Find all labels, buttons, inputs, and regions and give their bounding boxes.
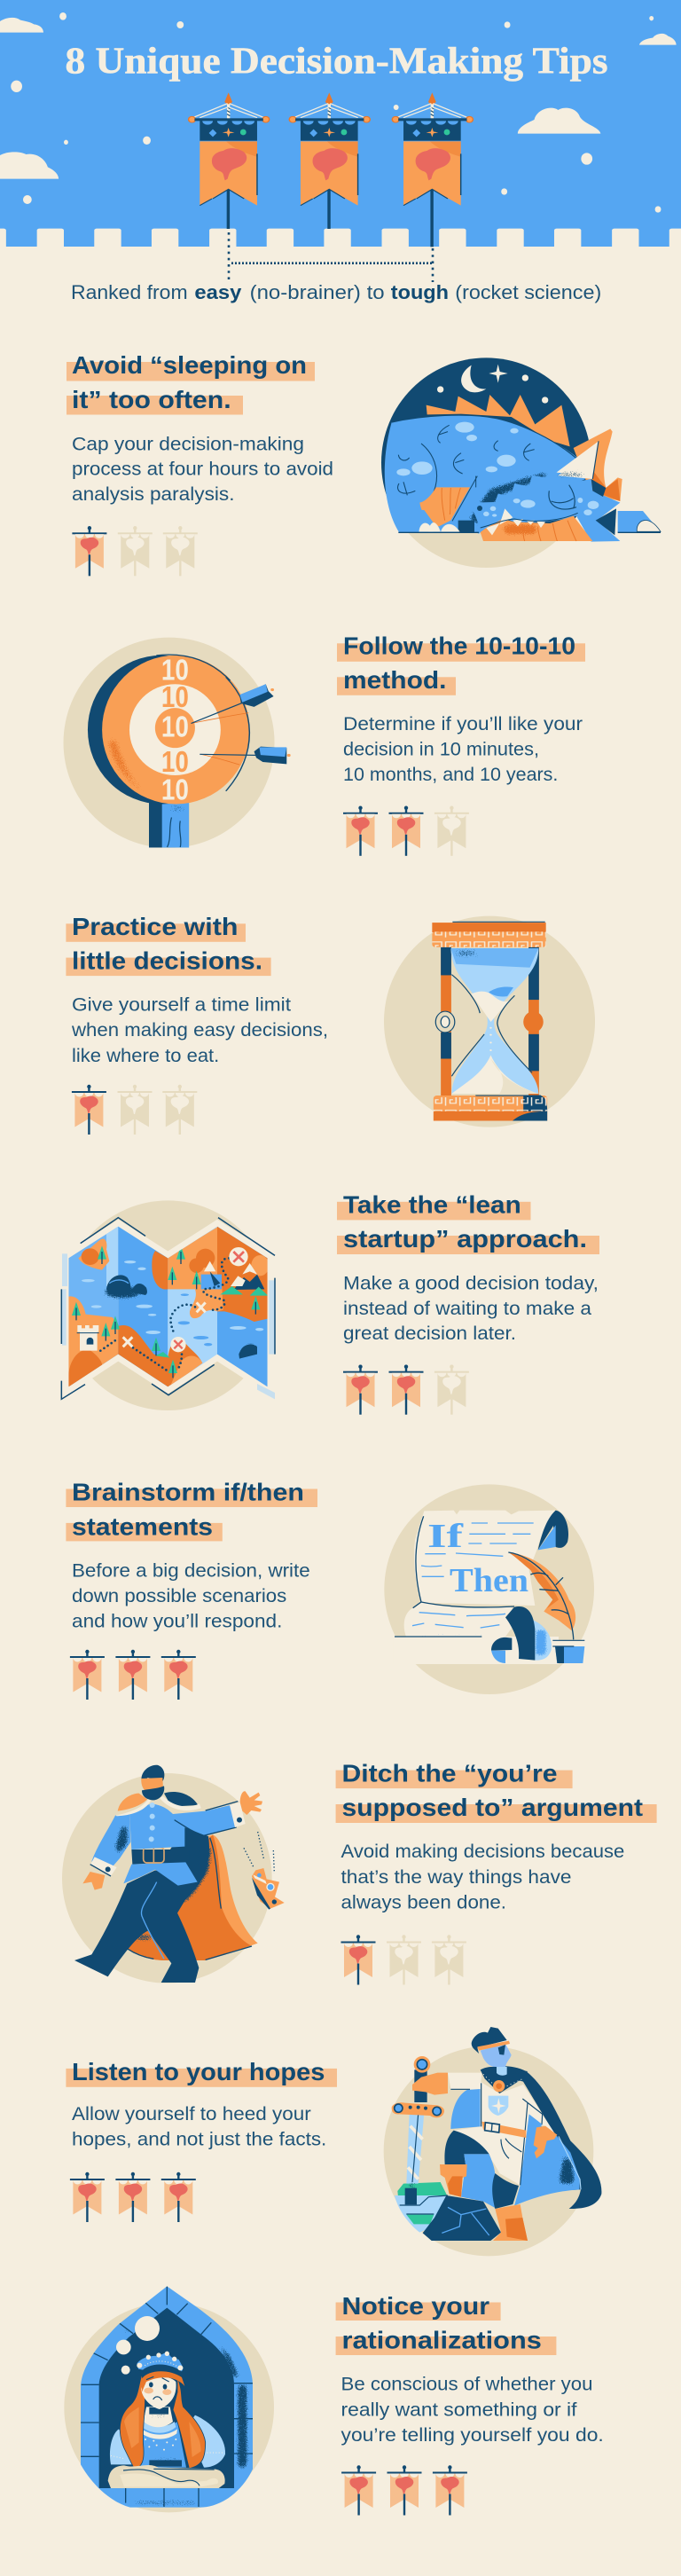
heading xyxy=(337,632,585,695)
body text: Cap your decision-making xyxy=(72,435,304,454)
panel: tip 3 practice with little decisions xyxy=(66,913,595,1135)
scene: clouds, dots, battlements and banners xyxy=(0,12,681,249)
heading: startup” approach. xyxy=(343,1225,587,1253)
panel: tip 7 listen to your hopes xyxy=(66,2027,601,2256)
heading xyxy=(66,913,271,976)
heading xyxy=(67,351,315,415)
heading: Listen to your hopes xyxy=(72,2058,325,2085)
illustration: archery target xyxy=(64,638,291,848)
heading: Take the “lean xyxy=(343,1190,521,1219)
illustration: scroll and quill xyxy=(384,1484,594,1694)
heading: rationalizations xyxy=(342,2326,542,2353)
body text: Avoid making decisions because xyxy=(340,1842,624,1862)
scroll lettering: Then xyxy=(450,1562,528,1599)
body text: process at four hours to avoid xyxy=(72,459,333,480)
heading: Avoid “sleeping on xyxy=(72,351,307,379)
body text xyxy=(343,714,583,785)
body text: down possible scenarios xyxy=(72,1586,286,1606)
body text: when making easy decisions, xyxy=(71,1020,328,1041)
illustration: sad queen in window xyxy=(64,2286,274,2512)
body text: really want something or if xyxy=(340,2399,577,2420)
heading xyxy=(337,1190,599,1254)
body text: Determine if you’ll like your xyxy=(343,714,583,734)
rating: 3 of 3 banners xyxy=(70,2172,196,2222)
illustration: king dropping crown xyxy=(62,1765,285,1983)
heading: it” too often. xyxy=(72,386,231,413)
body text: 10 months, and 10 years. xyxy=(343,765,558,785)
body text: Allow yourself to heed your xyxy=(72,2104,311,2124)
ranking subtitle: (rocket science) xyxy=(455,281,601,303)
heading xyxy=(66,1479,317,1541)
target numbers: 10 xyxy=(161,680,189,713)
body text: and how you’ll respond. xyxy=(72,1611,282,1631)
illustration: hourglass xyxy=(384,916,595,1127)
body text: you’re telling yourself you do. xyxy=(340,2425,604,2446)
panel: tip 6 ditch you're supposed to xyxy=(62,1759,657,1985)
rating: 3 of 3 banners xyxy=(341,2465,467,2516)
body text xyxy=(72,1560,310,1631)
body text xyxy=(72,435,333,505)
body text: great decision later. xyxy=(343,1323,516,1344)
target numbers xyxy=(161,653,189,806)
scroll lettering xyxy=(427,1518,528,1599)
rating: 2 of 3 banners xyxy=(343,806,469,856)
target numbers: 10 xyxy=(161,653,189,687)
heading xyxy=(336,2292,556,2355)
body text: hopes, and not just the facts. xyxy=(72,2129,326,2150)
heading: Notice your xyxy=(342,2292,489,2320)
heading: Brainstorm if/then xyxy=(72,1479,304,1506)
illustration: knight with sword xyxy=(384,2027,601,2256)
panel: tip 4 lean startup xyxy=(61,1190,599,1415)
rating: 1 of 3 banners xyxy=(340,1935,466,1985)
heading xyxy=(336,1759,657,1823)
heading: method. xyxy=(343,666,447,694)
rating: 1 of 3 banners xyxy=(72,1085,197,1135)
body text: Before a big decision, write xyxy=(72,1560,310,1581)
heading: supposed to” argument xyxy=(342,1794,643,1821)
body text xyxy=(71,995,328,1066)
body text: Give yourself a time limit xyxy=(72,995,291,1016)
rating: 2 of 3 banners xyxy=(343,1364,469,1415)
target numbers: 10 xyxy=(161,745,189,778)
rating: 3 of 3 banners xyxy=(70,1650,196,1700)
ranking subtitle: (no-brainer) to xyxy=(250,281,385,303)
target numbers: 10 xyxy=(161,774,189,806)
illustration: treasure map xyxy=(61,1200,275,1410)
body text xyxy=(340,2374,604,2446)
body text xyxy=(340,1842,624,1912)
body text xyxy=(343,1273,599,1344)
panel: tip 5 brainstorm if/then xyxy=(66,1479,594,1700)
panel: tip 1 avoid sleeping on it xyxy=(67,351,661,576)
body text: that’s the way things have xyxy=(340,1867,571,1888)
body text: analysis paralysis. xyxy=(72,484,234,505)
heading: Ditch the “you’re xyxy=(342,1759,557,1787)
ranking subtitle xyxy=(71,281,601,303)
target numbers: 10 xyxy=(161,710,189,743)
heading: statements xyxy=(72,1512,213,1540)
panel: tip 8 notice your rationalizations xyxy=(64,2286,604,2516)
heading: Follow the 10-10-10 xyxy=(343,632,575,660)
panel: tip 2 10-10-10 method xyxy=(64,632,585,856)
body text: instead of waiting to make a xyxy=(343,1299,591,1319)
body text: Be conscious of whether you xyxy=(340,2374,592,2395)
dotted ranking connector xyxy=(229,232,433,282)
ranking subtitle: Ranked from xyxy=(71,281,188,303)
ranking subtitle: easy xyxy=(194,281,242,303)
panel: header sky and castle xyxy=(0,0,681,249)
illustration: sleeping dragon at night xyxy=(379,355,661,568)
body text xyxy=(72,2104,326,2150)
body text: always been done. xyxy=(340,1892,506,1912)
body text: like where to eat. xyxy=(72,1046,219,1066)
body text: Make a good decision today, xyxy=(343,1273,599,1293)
heading: little decisions. xyxy=(72,947,262,975)
ranking subtitle: tough xyxy=(391,281,449,303)
rating: 1 of 3 banners xyxy=(72,526,198,576)
body text: decision in 10 minutes, xyxy=(343,740,539,759)
title: 8 Unique Decision-Making Tips xyxy=(66,42,608,82)
scroll lettering: If xyxy=(427,1518,465,1555)
heading: Practice with xyxy=(72,913,238,940)
